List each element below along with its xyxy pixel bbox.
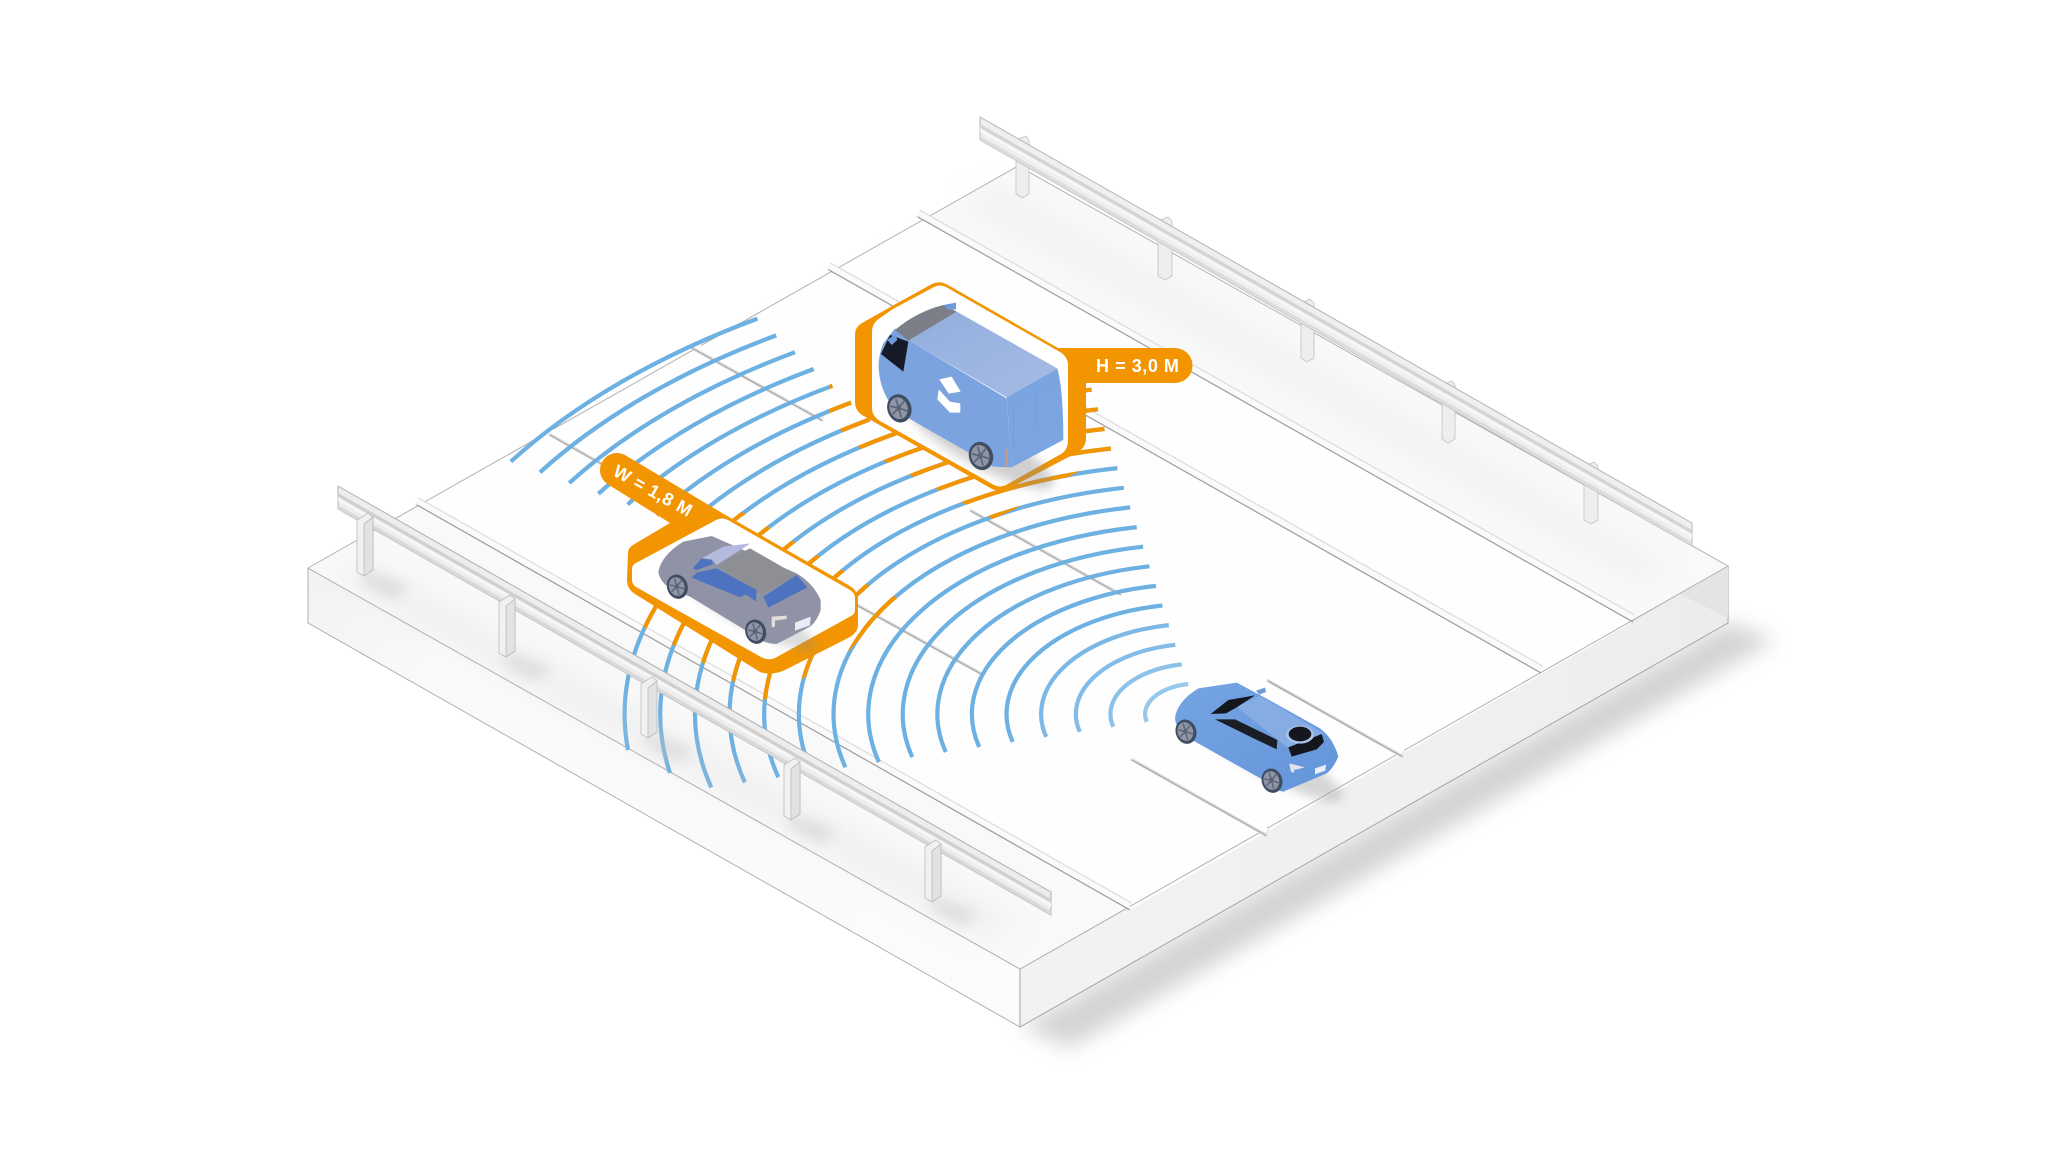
far road edge line xyxy=(918,213,1633,622)
car sensor frame xyxy=(600,453,858,674)
van wing mirror xyxy=(887,334,897,345)
grey car rear wheel xyxy=(742,617,769,647)
orange reflected arcs near van xyxy=(830,384,1112,519)
van windshield xyxy=(881,335,908,372)
van rear wheel xyxy=(965,439,997,473)
slab ground shadow xyxy=(1020,622,1775,1048)
front guardrail beam xyxy=(338,486,1051,915)
van roof xyxy=(908,312,1057,397)
guardrail posts xyxy=(1016,136,1598,524)
van frame interior xyxy=(872,286,1068,486)
post 5 xyxy=(925,840,941,902)
blue wave arcs xyxy=(511,319,1188,787)
van tail light xyxy=(1005,449,1008,466)
width label: W = 1,8 M xyxy=(610,461,696,521)
slab corner glass tint xyxy=(1680,566,1728,618)
post 1 xyxy=(357,513,373,576)
van rear xyxy=(1007,368,1063,467)
grey car xyxy=(658,536,825,663)
grey car shadow xyxy=(669,557,825,663)
slab top face xyxy=(308,166,1728,969)
blue car shadow xyxy=(1182,699,1351,815)
car frame orange band and width pill xyxy=(600,453,858,674)
blue car tail light and plate xyxy=(1289,763,1326,774)
blue car body xyxy=(1175,683,1338,792)
van logo xyxy=(937,377,961,413)
post 4 xyxy=(784,758,800,820)
van shadow xyxy=(897,387,1063,503)
blue car front wheel xyxy=(1172,717,1200,747)
road surface xyxy=(417,217,1633,910)
grey car tail light and plate xyxy=(772,616,811,631)
slab left face xyxy=(308,568,1020,1027)
blue car lidar sensor xyxy=(1286,726,1314,744)
middle road line xyxy=(829,266,1541,673)
guardrail beam xyxy=(980,117,1692,546)
near road edge line xyxy=(417,501,1130,910)
grey car body xyxy=(658,536,821,644)
blue car mirror xyxy=(1256,688,1266,695)
van rear door detail xyxy=(1013,382,1057,445)
back guardrail xyxy=(960,117,1692,580)
car frame interior xyxy=(632,518,855,659)
van xyxy=(879,303,1063,503)
grey car roof xyxy=(717,548,797,595)
sensor waves xyxy=(511,319,1188,787)
blue car roof xyxy=(1237,696,1324,748)
van frame orange band and height pill xyxy=(855,282,1192,491)
height label: H = 3,0 M xyxy=(1096,356,1179,376)
grey car front wheel xyxy=(664,572,691,602)
van roof sensor pod xyxy=(895,305,957,341)
post 3 xyxy=(641,677,657,738)
post ground shadows xyxy=(360,570,978,927)
blue car rear wheel xyxy=(1258,766,1286,796)
front guardrail posts xyxy=(357,513,941,902)
blue car side window xyxy=(1215,719,1277,749)
front guardrail xyxy=(338,486,1051,935)
guardrail shadow xyxy=(960,190,1670,580)
van side body xyxy=(879,328,1012,467)
post 2 xyxy=(499,595,515,657)
grey car side window xyxy=(692,568,757,601)
grey car windshield xyxy=(693,558,713,570)
front guardrail shadow xyxy=(340,560,1020,935)
slab top outline xyxy=(308,166,1728,969)
road slab xyxy=(308,166,1775,1048)
lane lines xyxy=(417,213,1633,910)
van front wheel xyxy=(883,391,915,426)
grey car rear window xyxy=(763,575,807,608)
van spoiler xyxy=(943,303,956,310)
blue ego car xyxy=(1172,683,1351,815)
orange reflected arcs near car xyxy=(644,512,898,700)
lane dashes xyxy=(550,342,1403,836)
van sensor frame xyxy=(855,282,1192,491)
slab right face xyxy=(1020,566,1728,1027)
blue car windshield xyxy=(1211,695,1255,714)
grey car glass highlight xyxy=(702,543,751,565)
blue car rear window xyxy=(1288,734,1324,757)
